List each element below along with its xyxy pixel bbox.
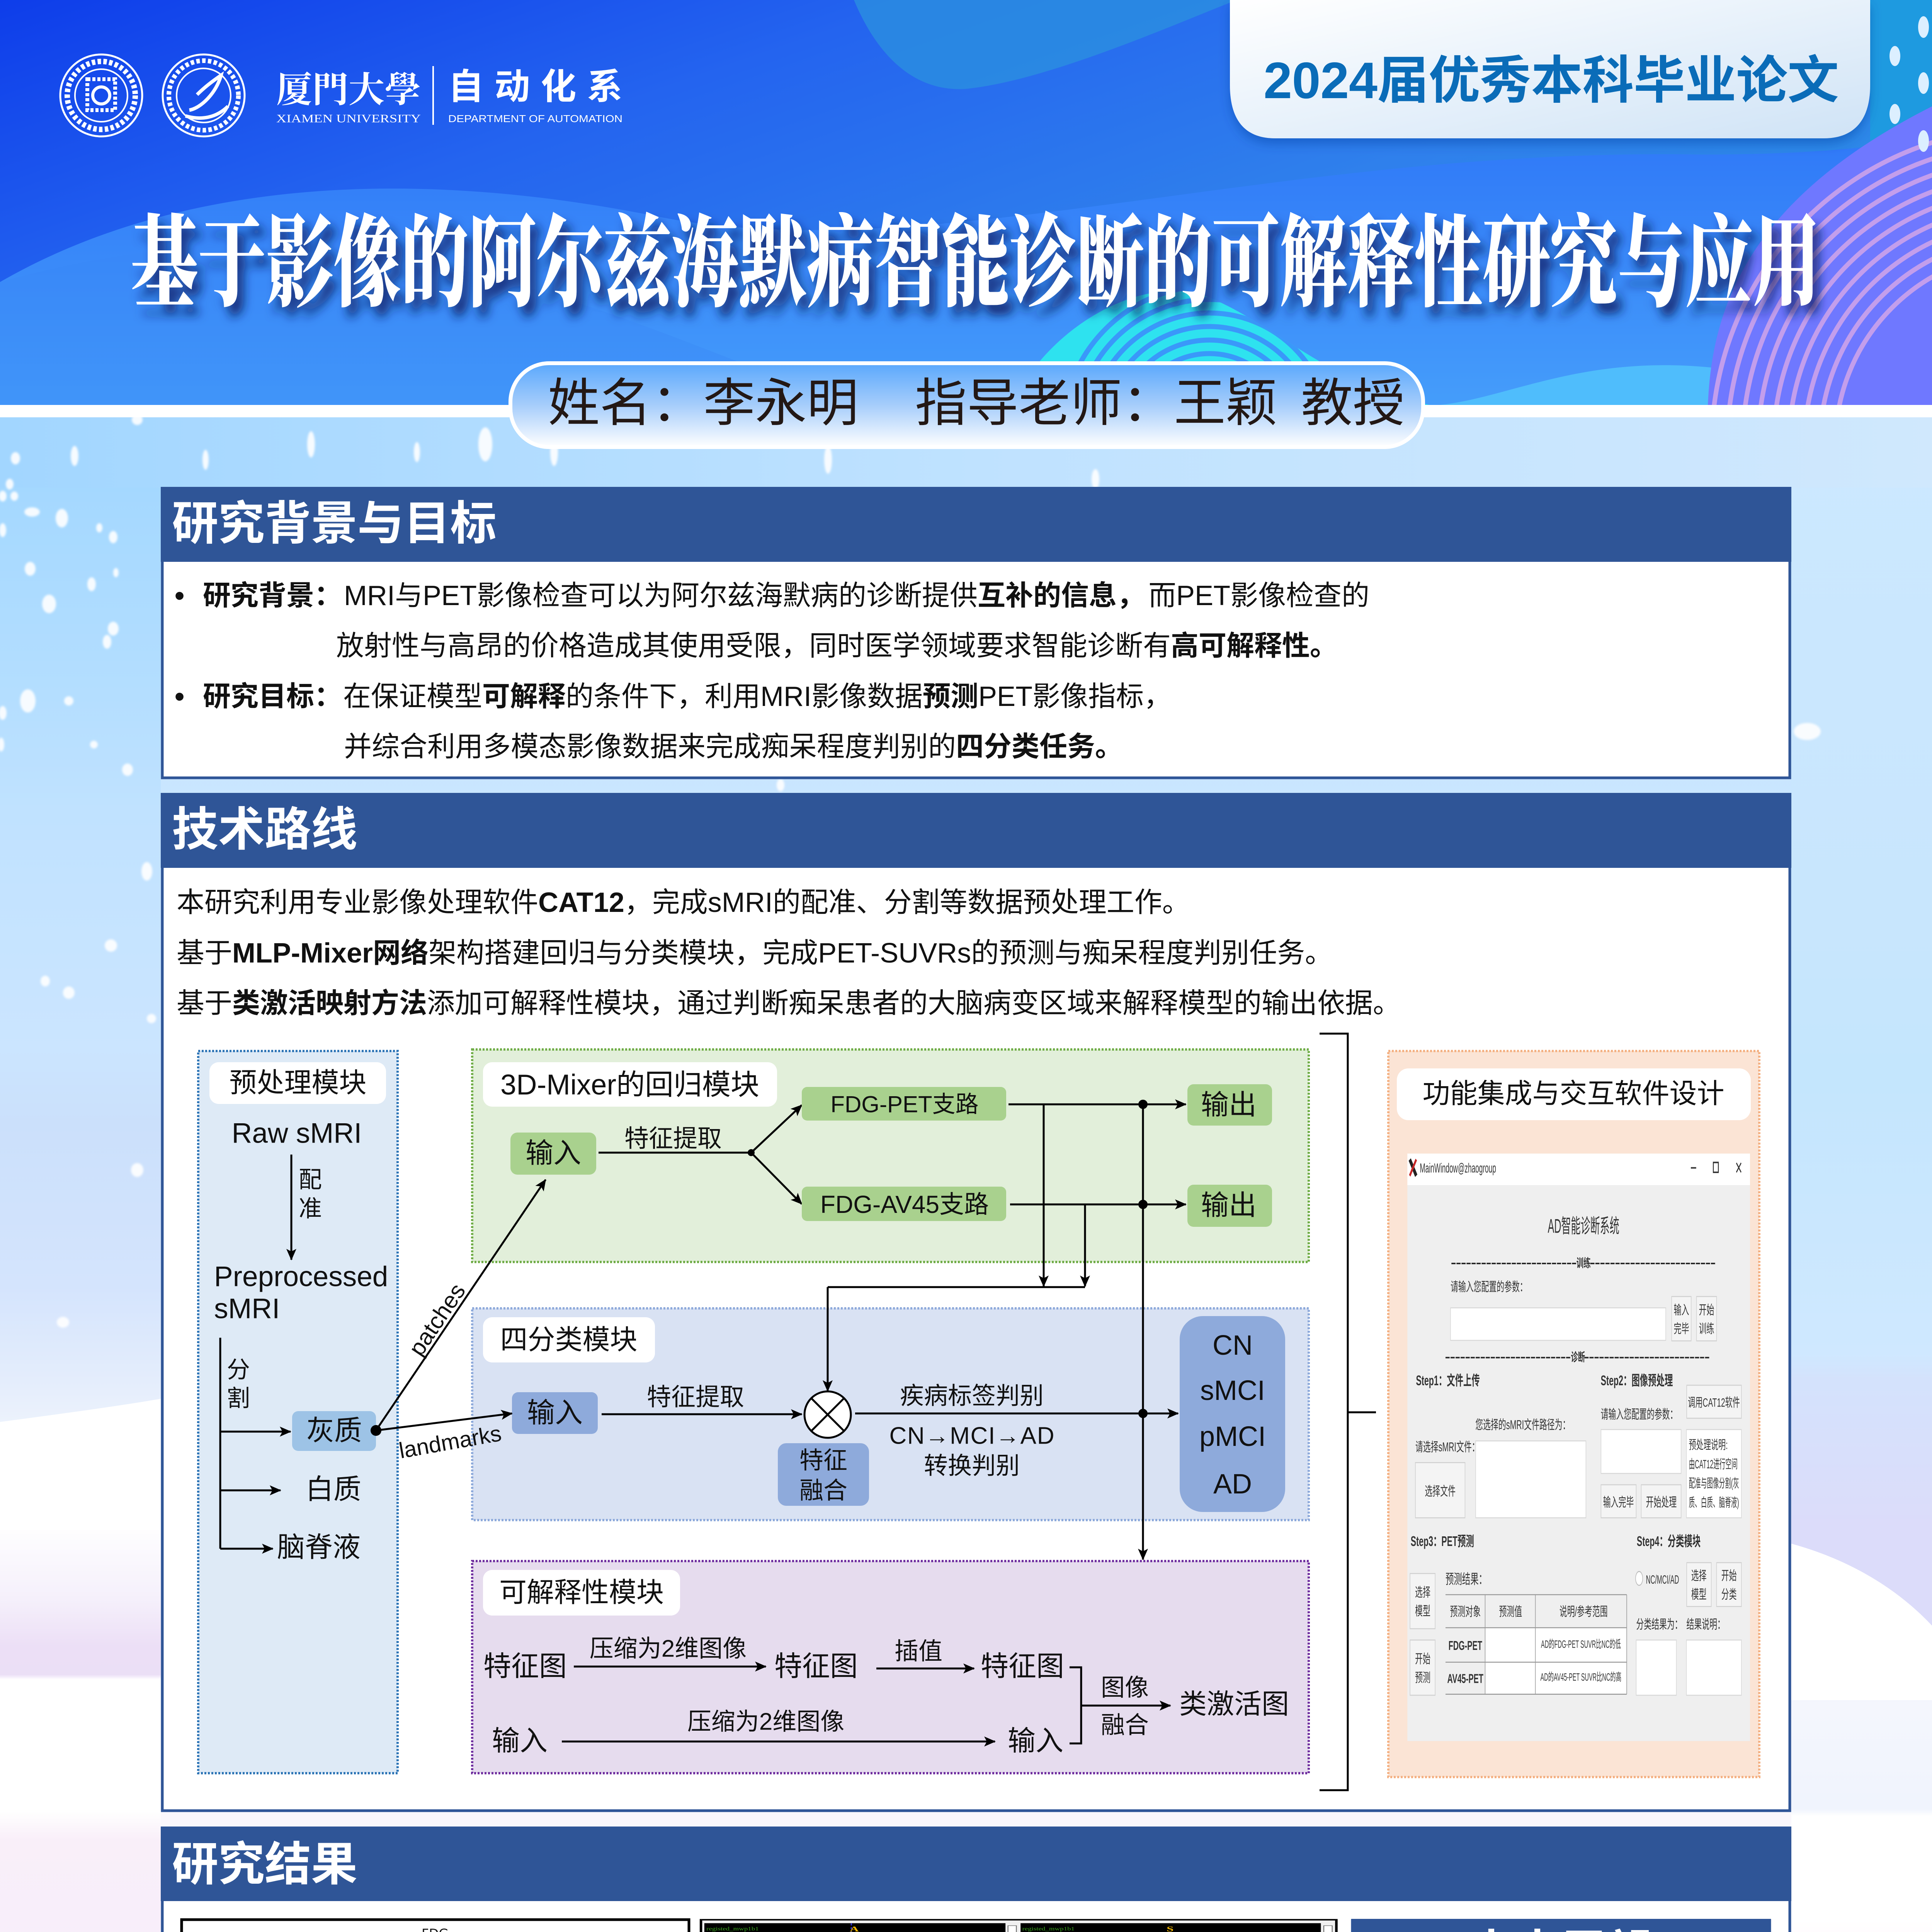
text block: research goal — [175, 681, 1172, 762]
screenshot: AD diagnosis software window: 选择 — [1415, 1585, 1430, 1599]
node: preprocessed sMRI — [214, 1261, 388, 1325]
node: output 2 — [1187, 1185, 1272, 1227]
heading: technical route: 技术路线 — [172, 804, 357, 855]
screenshot: AD diagnosis software window — [1407, 1153, 1750, 1741]
screenshot: AD diagnosis software window: Step3：PET预测 — [1411, 1534, 1474, 1549]
viewer labels — [705, 1925, 1319, 1932]
screenshot: AD diagnosis software window: 预测 — [1415, 1670, 1430, 1685]
label: classification module: 四分类模块 — [500, 1325, 638, 1355]
text block: research background: 放射性与高昂的价格造成其使用受限，同时医学领域要求智能诊断有高可解释性。 — [336, 631, 1338, 662]
screenshot: AD diagnosis software window: 输入 — [1674, 1303, 1689, 1317]
wordmark: Xiamen University: XIAMEN UNIVERSITY — [276, 112, 421, 125]
node: input — [510, 1133, 596, 1175]
node: raw sMRI: Raw sMRI — [232, 1117, 362, 1149]
text block: research goal: 在保证模型 — [343, 681, 482, 712]
author pill — [510, 363, 1423, 447]
title: 基于影像的阿尔兹海默病智能诊断的可解释性研究与应用 — [131, 183, 1820, 327]
arrows: module connections: patches — [403, 1279, 471, 1361]
icon: feature fusion operator — [804, 1391, 851, 1438]
arrows: segmentation — [220, 1338, 291, 1549]
node: input: 输入 — [526, 1138, 581, 1169]
text block: research background: 互补的信息，而PET影像检查的 — [978, 580, 1369, 611]
screenshot: AD diagnosis software window: 训练 — [1577, 1257, 1591, 1270]
screenshot: AD diagnosis software window: 模型 — [1415, 1604, 1430, 1618]
arrow: feature extraction: 特征提取 — [624, 1125, 722, 1152]
panel: technical route — [161, 793, 1791, 1811]
flow: feature map compression: 压缩为2维图像 — [590, 1635, 747, 1662]
text block: research goal: • — [175, 681, 184, 712]
screenshot: AD diagnosis software window: 选择 — [1691, 1568, 1706, 1583]
node: FDG-PET branch — [802, 1087, 1006, 1121]
node: output 2: 输出 — [1201, 1190, 1257, 1221]
module: interpretability — [472, 1561, 1309, 1773]
arrow: feature extraction — [599, 1105, 802, 1204]
module: software design — [1388, 1051, 1759, 1777]
screenshot: AD diagnosis software window: 开始 — [1699, 1303, 1714, 1317]
flow: image fusion: 融合 — [1101, 1712, 1149, 1739]
label: disease label discrimination: 转换判别 — [924, 1453, 1020, 1479]
flow: input compression: 压缩为2维图像 — [687, 1709, 844, 1735]
label: disease label discrimination: CN→MCI→AD — [889, 1423, 1054, 1449]
screenshot: AD diagnosis software window: 您选择的sMRI文件路径为： — [1475, 1417, 1570, 1432]
arrows: module connections: landmarks — [397, 1421, 503, 1463]
screenshot: AD diagnosis software window: 选择文件 — [1425, 1484, 1456, 1498]
node: grey matter — [292, 1411, 376, 1451]
node: feature fusion: 特征 — [799, 1447, 847, 1474]
screenshot: AD diagnosis software window: Step1：文件上传 — [1416, 1373, 1480, 1388]
label: regression module: 3D-Mixer的回归模块 — [500, 1069, 759, 1100]
wordmark: Department of Automation: DEPARTMENT OF AUTOMATION — [448, 113, 622, 124]
screenshot: AD diagnosis software window: FDG-PET — [1449, 1638, 1482, 1653]
node: input: 输入 — [527, 1398, 583, 1429]
text block: research background: • — [175, 580, 184, 611]
node: FDG-AV45 branch: FDG-AV45支路 — [820, 1190, 989, 1218]
screenshot: AD diagnosis software window: 说明/参考范围 — [1560, 1604, 1608, 1619]
text block: research background: 研究背景： — [203, 580, 342, 611]
node: preprocessed sMRI: Preprocessed — [214, 1261, 388, 1292]
viewer labels: registed_mwp1b1 — [1022, 1926, 1075, 1932]
screenshot: AD diagnosis software window: NC/MCI/AD — [1646, 1572, 1679, 1587]
flow: image fusion — [1070, 1667, 1289, 1743]
node: class output: AD — [1213, 1469, 1252, 1500]
screenshot: AD diagnosis software window: AV45-PET — [1447, 1671, 1483, 1686]
figure: AAL-3 brain segmentation — [701, 1920, 1337, 1932]
flow: feature map compression: 特征图 — [483, 1651, 567, 1682]
node: preprocessed sMRI: sMRI — [214, 1293, 280, 1325]
author pill: 教授 — [1301, 375, 1405, 432]
logo: Xiamen University emblem — [60, 54, 142, 136]
panel: research results — [161, 1827, 1791, 1932]
author pill: 指导老师：王颖 — [915, 375, 1277, 432]
screenshot: AD diagnosis software window: 预测对象 — [1450, 1604, 1481, 1619]
screenshot: AD diagnosis software window: Step4：分类模块 — [1637, 1534, 1701, 1549]
node: white matter: 白质 — [306, 1474, 361, 1505]
screenshot: AD diagnosis software window: MainWindow@zhaogroup — [1420, 1161, 1496, 1176]
screenshot: AD diagnosis software window: 调用CAT12软件 — [1688, 1395, 1740, 1410]
author pill: 姓名：李永明 — [548, 375, 859, 432]
screenshot: AD diagnosis software window: 配准与图像分割(灰 — [1689, 1476, 1739, 1490]
node: output 1 — [1187, 1084, 1272, 1126]
node: FDG-AV45 branch — [802, 1187, 1006, 1221]
panel: future outlook — [1351, 1919, 1781, 1932]
node: input — [512, 1392, 598, 1434]
screenshot: AD diagnosis software window: 预测结果： — [1446, 1571, 1487, 1587]
module: 3D-Mixer regression — [472, 1049, 1309, 1262]
text block: method summary — [177, 887, 1401, 1019]
screenshot: AD diagnosis software window: 模型 — [1691, 1587, 1706, 1602]
node: class output: sMCI — [1200, 1375, 1265, 1406]
label: interpretability module: 可解释性模块 — [499, 1577, 664, 1608]
arrows: segmentation: 割 — [227, 1386, 250, 1411]
screenshot: AD diagnosis software window: 诊断 — [1571, 1351, 1585, 1364]
text block: method summary: 基于类激活映射方法添加可解释性模块，通过判断痴呆患者的大脑病变区域来解释模型的输出依据。 — [177, 988, 1401, 1019]
label: interpretability module — [483, 1570, 680, 1616]
badge: outstanding thesis: 2024届优秀本科毕业论文 — [1264, 52, 1839, 109]
arrows: module connections — [371, 1100, 1186, 1560]
flow: input compression — [492, 1709, 1063, 1757]
panel: research background and goals — [161, 487, 1791, 778]
chart: FDG-PET SUVR scatter plots — [182, 1920, 689, 1932]
module: preprocessing — [198, 1051, 398, 1773]
node: feature fusion: 融合 — [799, 1478, 847, 1504]
flow: input compression: 输入 — [492, 1726, 548, 1757]
label: preprocessing module — [209, 1062, 386, 1104]
bracket connector — [1320, 1034, 1376, 1790]
screenshot: AD diagnosis software window: 开始处理 — [1646, 1495, 1677, 1509]
screenshot: AD diagnosis software window: 训练 — [1699, 1321, 1714, 1336]
screenshot: AD diagnosis software window: 请输入您配置的参数： — [1451, 1279, 1527, 1294]
flow: image fusion: 类激活图 — [1179, 1689, 1289, 1719]
node: feature fusion — [778, 1443, 869, 1506]
screenshot: AD diagnosis software window: AD的AV45-PET SUVR比NC的高 — [1541, 1671, 1621, 1683]
screenshot: AD diagnosis software window: 预测值 — [1499, 1604, 1522, 1619]
screenshot: AD diagnosis software window: 分类 — [1721, 1587, 1736, 1602]
text block: method summary: 本研究利用专业影像处理软件CAT12，完成sMRI的配准、分割等数据预处理工作。 — [177, 887, 1190, 918]
viewer labels: registed_mwp1b1 — [706, 1926, 759, 1932]
screenshot: AD diagnosis software window: 结果说明： — [1686, 1617, 1725, 1631]
wordmark: Department of Automation: 自动化系 — [448, 67, 622, 107]
label: disease label discrimination: 疾病标签判别 — [900, 1383, 1044, 1410]
screenshot: AD diagnosis software window: AD的FDG-PET SUVR比NC的低 — [1541, 1638, 1621, 1650]
heading: research results: 研究结果 — [172, 1838, 357, 1890]
screenshot: AD diagnosis software window: 由CAT12进行空间 — [1689, 1457, 1738, 1471]
node: grey matter: 灰质 — [306, 1415, 362, 1446]
text block: research goal: 可解释的条件下，利用MRI影像数据预测PET影像指标， — [482, 681, 1172, 712]
node: class output — [1180, 1316, 1285, 1512]
flow: feature map compression: 插值 — [895, 1638, 942, 1665]
wordmark: Xiamen University: 厦門大學 — [276, 61, 421, 112]
heading: research background and goals: 研究背景与目标 — [172, 498, 497, 549]
screenshot: AD diagnosis software window: 请选择sMRI文件： — [1415, 1440, 1480, 1454]
node: class output: CN — [1213, 1330, 1253, 1361]
module: four-class classification — [472, 1308, 1309, 1520]
screenshot: AD diagnosis software window: AD智能诊断系统 — [1548, 1215, 1619, 1237]
badge: outstanding thesis — [1230, 0, 1870, 138]
arrow: registration — [291, 1155, 322, 1260]
text block: method summary: 基于MLP-Mixer网络架构搭建回归与分类模块，完成PET-SUVRs的预测与痴呆程度判别任务。 — [177, 938, 1333, 969]
header banner — [0, 0, 1932, 405]
screenshot: AD diagnosis software window: Step2：图像预处理 — [1601, 1373, 1673, 1388]
screenshot: AD diagnosis software window: 质、白质、脑脊液) — [1689, 1495, 1739, 1510]
label: software design — [1397, 1068, 1751, 1120]
screenshot: AD diagnosis software window: 预处理说明: — [1689, 1438, 1728, 1452]
node: FDG-PET branch: FDG-PET支路 — [830, 1091, 979, 1117]
flow: feature map compression: 特征图 — [981, 1651, 1064, 1682]
label: regression module — [483, 1062, 777, 1107]
text block: research background — [175, 580, 1369, 662]
label: disease label discrimination — [889, 1383, 1054, 1479]
screenshot: AD diagnosis software window: 开始 — [1415, 1651, 1430, 1666]
arrow: registration: 配 — [299, 1167, 322, 1192]
screenshot: AD diagnosis software window: 分类结果为： — [1636, 1617, 1682, 1631]
wordmark: Department of Automation — [448, 67, 622, 124]
text block: research goal: 并综合利用多模态影像数据来完成痴呆程度判别的四分类任务。 — [344, 731, 1123, 762]
text block: research goal: 研究目标： — [203, 681, 342, 712]
flow: feature map compression: 特征图 — [774, 1651, 858, 1682]
screenshot: AD diagnosis software window: 输入完毕 — [1603, 1495, 1634, 1509]
flow: image fusion: 图像 — [1101, 1675, 1149, 1701]
label: classification module — [483, 1317, 655, 1362]
flow: input compression: 输入 — [1008, 1726, 1063, 1757]
screenshot: AD diagnosis software window: 请输入您配置的参数： — [1601, 1407, 1677, 1422]
label: software design: 功能集成与交互软件设计 — [1422, 1079, 1725, 1109]
node: output 1: 输出 — [1201, 1090, 1257, 1121]
crosshairs and scale bars — [786, 1923, 1318, 1932]
viewer controls — [710, 1926, 1332, 1932]
text block: research background: MRI与PET影像检查可以为阿尔兹海默病的诊断提供 — [344, 580, 978, 611]
logo: Department emblem — [163, 54, 245, 136]
screenshot: AD diagnosis software window: 完毕 — [1674, 1321, 1689, 1336]
screenshot: AD diagnosis software window: 开始 — [1721, 1568, 1736, 1583]
flow: feature map compression — [483, 1635, 1064, 1682]
label: preprocessing module: 预处理模块 — [229, 1068, 367, 1098]
node: class output: pMCI — [1199, 1421, 1266, 1452]
node: cerebrospinal fluid: 脑脊液 — [277, 1532, 361, 1563]
divider — [432, 66, 434, 125]
arrow: feature extraction: 特征提取 — [647, 1384, 744, 1411]
arrows: segmentation: 分 — [227, 1357, 250, 1383]
arrow: registration: 准 — [299, 1196, 322, 1222]
